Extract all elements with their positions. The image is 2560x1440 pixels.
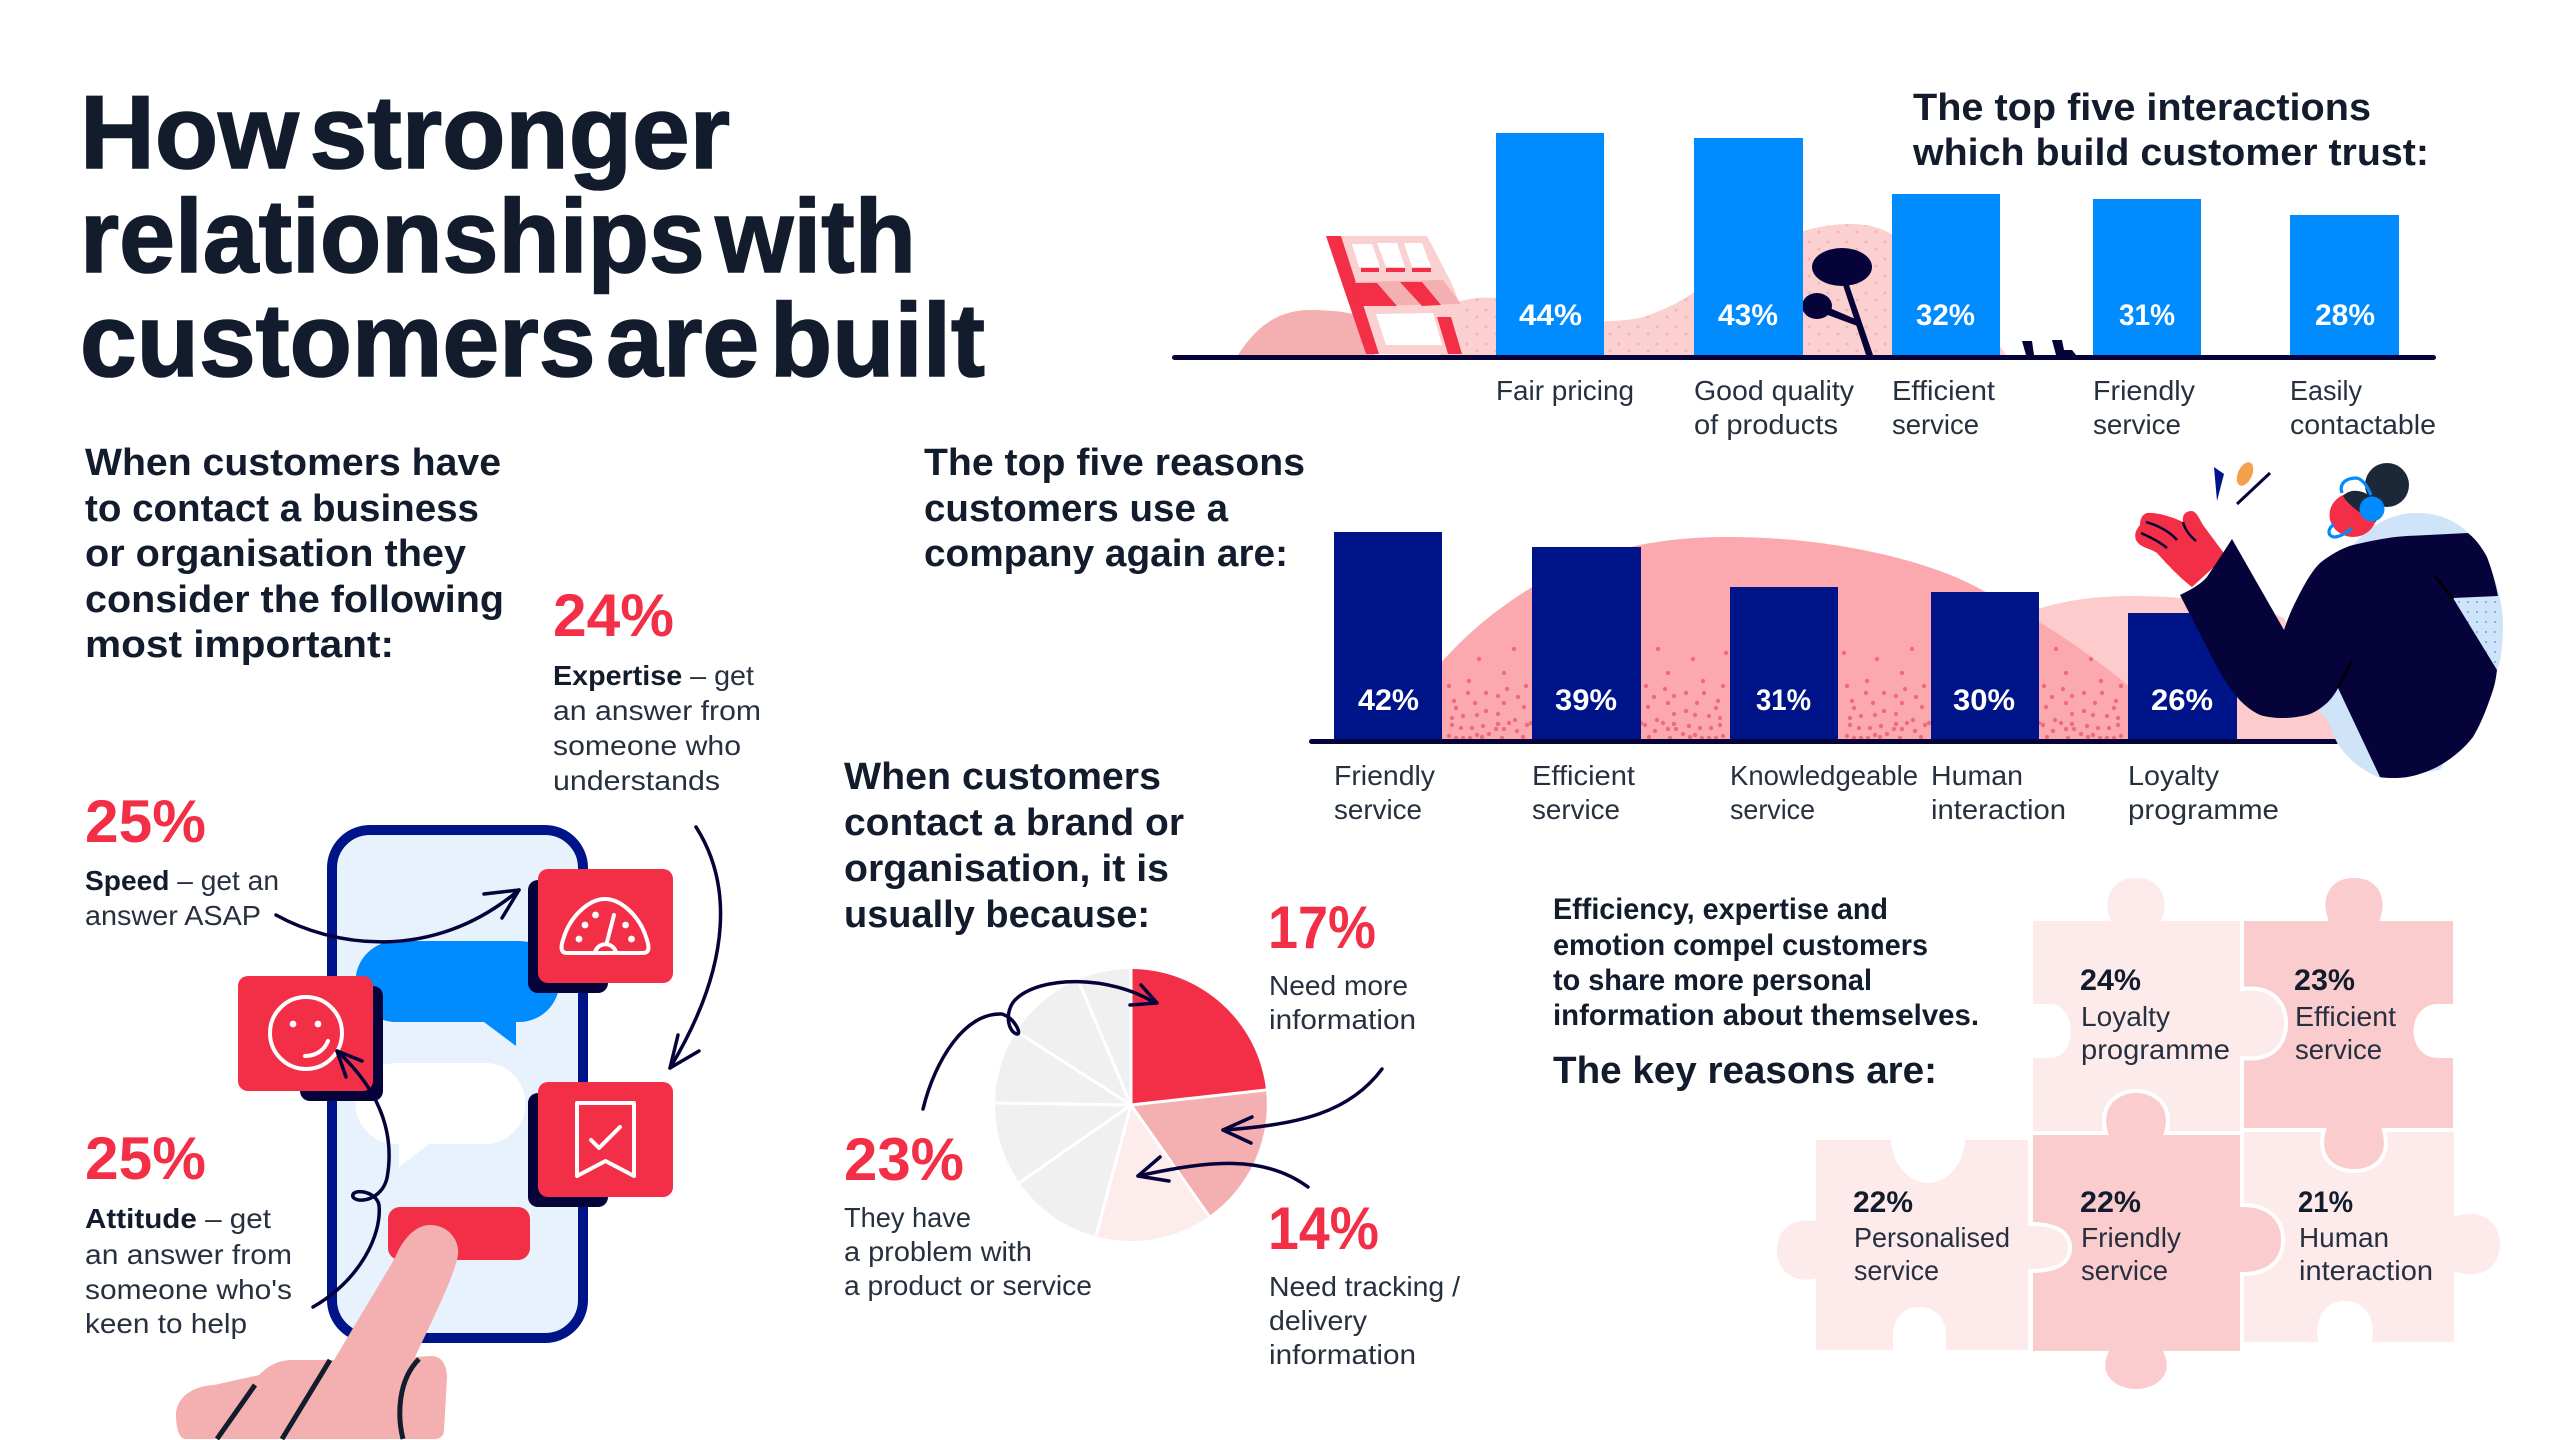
puzzle piece: friendly service [2031, 1091, 2283, 1391]
stat: speed 25% [85, 788, 279, 931]
red button [388, 1207, 530, 1260]
puzzle labels: 22% [1853, 1186, 1913, 1219]
bar chart: repeat-use reasons: 31% [1756, 684, 1811, 717]
puzzle labels: Loyalty [2081, 1001, 2170, 1032]
trust chart labels: service [1892, 409, 1979, 440]
icon card: smiley [238, 976, 383, 1101]
illustration: hills, shop and tree behind the trust chart [1238, 224, 2076, 355]
heading: reasons customers contact a brand: usually because: [844, 894, 1150, 936]
text: efficiency, expertise and emotion: information about themselves. [1553, 999, 1979, 1032]
trust chart labels: of products [1694, 409, 1838, 440]
heading: top five reasons: customers use a [924, 488, 1229, 530]
bar chart: trust interactions: 44% [1519, 299, 1582, 332]
bar chart: repeat-use reasons: 30% [1953, 684, 2015, 717]
stat: attitude 25%: Attitude – get [85, 1203, 271, 1234]
hills behind repeat-use chart [1392, 537, 2340, 740]
red hand [2135, 511, 2226, 587]
heading: top five interactions: The top five interactions [1913, 87, 2371, 129]
trust chart labels: Efficient [1892, 375, 1995, 406]
stat: 14% need tracking: Need tracking / [1269, 1271, 1460, 1302]
bar chart: repeat-use reasons [1309, 532, 2339, 825]
repeat-use chart labels: interaction [1931, 794, 2066, 825]
trust chart labels: Easily [2290, 375, 2362, 406]
bar chart: repeat-use reasons: 42% [1358, 684, 1419, 717]
heading: what customers consider most important: or organisation they [85, 533, 466, 575]
stat: speed 25%: answer ASAP [85, 900, 261, 931]
bar chart: trust interactions: 31% [2119, 299, 2175, 332]
repeat-use chart labels: Loyalty [2128, 760, 2219, 791]
puzzle labels: 23% [2294, 964, 2355, 997]
stat: 23% have a problem: a product or service [844, 1270, 1092, 1301]
repeat-use chart labels: Friendly [1334, 760, 1435, 791]
stat: attitude 25%: an answer from [85, 1239, 292, 1270]
arrow: expertise to bookmark [670, 827, 721, 1068]
heading: top five interactions: which build customer trust: [1912, 132, 2429, 174]
heading: what customers consider most important: consider the following [85, 579, 504, 621]
puzzle labels: service [2081, 1255, 2168, 1286]
dark hair bun [2365, 463, 2409, 507]
puzzle labels: programme [2081, 1034, 2230, 1065]
sparks [2214, 460, 2270, 504]
arrow: speed to gauge [276, 890, 519, 942]
repeat-use chart labels: service [1532, 794, 1620, 825]
puzzle labels [1853, 964, 2433, 1286]
puzzle labels: interaction [2299, 1255, 2433, 1286]
text: efficiency, expertise and emotion: emotion compel customers [1553, 929, 1928, 962]
repeat-use chart labels: programme [2128, 794, 2279, 825]
bar chart: repeat-use reasons: 39% [1555, 684, 1617, 717]
icon card: gauge [528, 869, 673, 993]
trust chart labels: Friendly [2093, 375, 2195, 406]
text: efficiency, expertise and emotion [1553, 893, 1979, 1032]
heading: reasons customers contact a brand [844, 756, 1184, 936]
puzzle labels: Friendly [2081, 1222, 2181, 1253]
stat: expertise 24%: understands [553, 765, 720, 796]
bar chart: repeat-use reasons: 26% [2151, 684, 2213, 717]
trust chart labels: Good quality [1694, 375, 1854, 406]
arrow: 23% to pie [923, 982, 1157, 1109]
stat: speed 25%: Speed – get an [85, 865, 279, 896]
repeat-use chart labels: Efficient [1532, 760, 1635, 791]
pie chart: contact reasons [995, 969, 1267, 1241]
heading: what customers consider most important [85, 442, 504, 666]
navy jacket [2180, 533, 2498, 778]
stat: 23% have a problem [844, 1126, 1092, 1301]
arrow: 17% to pie [1223, 1069, 1382, 1143]
stat: attitude 25% [85, 1125, 292, 1339]
bar chart: trust interactions [1172, 133, 2436, 440]
light blue undergarment [2320, 513, 2503, 778]
stat: expertise 24%: an answer from [553, 695, 761, 726]
heading: top five reasons: company again are: [924, 533, 1288, 575]
stat: expertise 24%: Expertise – get [553, 660, 754, 691]
stat: 17% need more information [1268, 894, 1416, 1035]
repeat-use chart labels: service [1334, 794, 1422, 825]
heading: top five interactions [1912, 87, 2429, 174]
title: relationships with [80, 179, 916, 295]
red face [2330, 493, 2376, 537]
puzzle: key reasons [1775, 876, 2502, 1391]
puzzle labels: 21% [2298, 1186, 2353, 1219]
stat: 17% need more information: 17% [1268, 894, 1376, 961]
heading: reasons customers contact a brand: organisation, it is [844, 848, 1169, 890]
text: efficiency, expertise and emotion: to share more personal [1553, 964, 1872, 997]
puzzle labels: Efficient [2295, 1001, 2396, 1032]
arrow: attitude to smiley [313, 1051, 389, 1307]
bar chart: trust interactions: 43% [1718, 299, 1778, 332]
puzzle labels: 22% [2080, 1186, 2141, 1219]
stat: 17% need more information: information [1269, 1004, 1416, 1035]
illustration: phone with hand and icons [176, 830, 673, 1439]
puzzle piece: human interaction [2242, 1130, 2502, 1344]
text: efficiency, expertise and emotion: Efficiency, expertise and [1553, 893, 1888, 926]
trust chart labels: Fair pricing [1496, 375, 1634, 406]
white chat bubble [356, 1063, 526, 1167]
stat: 14% need tracking: information [1269, 1339, 1416, 1370]
puzzle labels: service [2295, 1034, 2382, 1065]
title: customers are built [80, 283, 985, 399]
stat: 23% have a problem: 23% [844, 1126, 964, 1193]
bar chart: trust interactions: 28% [2315, 299, 2375, 332]
title [80, 75, 985, 399]
bar chart: trust interactions: 32% [1916, 299, 1975, 332]
stat: 17% need more information: Need more [1269, 970, 1408, 1001]
repeat-use chart labels: service [1730, 794, 1815, 825]
title: How stronger [80, 75, 730, 191]
heading: reasons customers contact a brand: contact a brand or [844, 802, 1184, 844]
stat: speed 25%: 25% [85, 788, 206, 855]
heading: what customers consider most important: to contact a business [85, 488, 479, 530]
icon card: bookmark [528, 1082, 673, 1207]
puzzle labels: Personalised [1854, 1222, 2010, 1253]
stat: attitude 25%: 25% [85, 1125, 206, 1192]
heading: reasons customers contact a brand: When customers [844, 756, 1161, 798]
small dark marks [2022, 340, 2076, 355]
shop building [1326, 236, 1463, 354]
puzzle labels: service [1854, 1255, 1939, 1286]
puzzle labels: Human [2299, 1222, 2389, 1253]
illustration: person with headset [2135, 460, 2503, 778]
heading: what customers consider most important: most important: [85, 624, 394, 666]
repeat-use chart labels: Knowledgeable [1730, 760, 1918, 791]
tree [1802, 248, 1873, 355]
puzzle piece: personalised service [1775, 1138, 2070, 1352]
trust chart labels [1496, 375, 2436, 440]
blue chat bubble [356, 941, 560, 1046]
hand pressing button [176, 1225, 458, 1439]
stat: expertise 24%: 24% [553, 582, 674, 649]
heading: the key reasons are: The key reasons are: [1553, 1050, 1937, 1092]
stat: 14% need tracking: delivery [1269, 1305, 1367, 1336]
stat: 23% have a problem: They have [844, 1202, 971, 1233]
trust chart labels: service [2093, 409, 2181, 440]
headset [2329, 478, 2384, 537]
trust chart labels: contactable [2290, 409, 2436, 440]
stat: expertise 24% [553, 582, 761, 796]
arrow: 14% to pie [1138, 1157, 1308, 1187]
heading: top five reasons: The top five reasons [924, 442, 1305, 484]
hair [2343, 491, 2377, 522]
stat: attitude 25%: someone who's [85, 1274, 292, 1305]
phone body [332, 830, 583, 1338]
heading: top five reasons [924, 442, 1305, 575]
puzzle piece: loyalty programme [2031, 876, 2286, 1133]
heading: what customers consider most important: When customers have [85, 442, 501, 484]
stat: 14% need tracking [1268, 1195, 1460, 1370]
stat: attitude 25%: keen to help [85, 1308, 247, 1339]
repeat-use chart labels [1334, 760, 2279, 825]
stat: expertise 24%: someone who [553, 730, 741, 761]
repeat-use chart labels: Human [1931, 760, 2023, 791]
puzzle piece: efficient service [2242, 876, 2455, 1171]
stat: 23% have a problem: a problem with [844, 1236, 1032, 1267]
stat: 14% need tracking: 14% [1268, 1195, 1379, 1262]
puzzle labels: 24% [2080, 964, 2141, 997]
